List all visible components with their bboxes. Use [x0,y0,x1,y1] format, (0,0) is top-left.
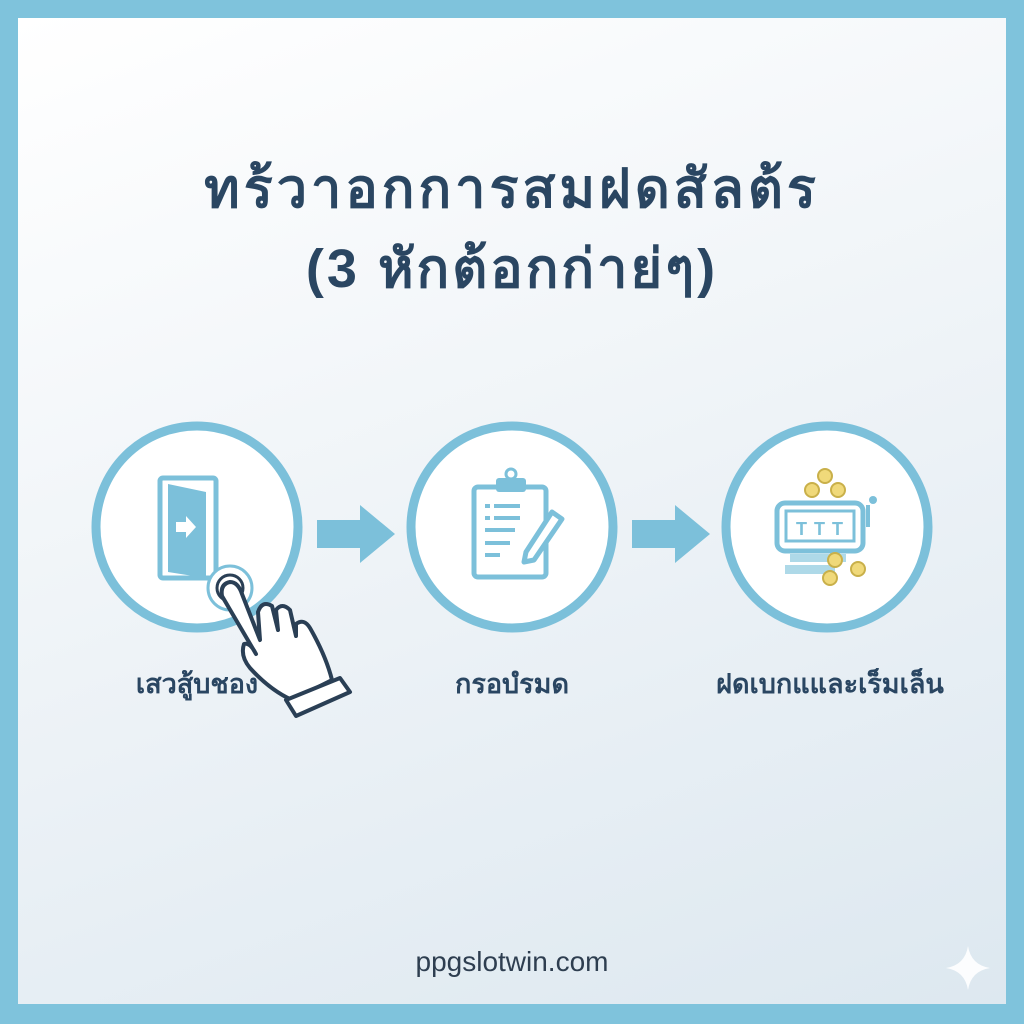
icon: pointing hand [206,564,352,718]
step 3 circle: slot machine icon: T [814,519,825,539]
label step 1: เสวสู้บชอง [136,669,258,699]
step 3 circle: slot machine icon [726,426,928,628]
title [204,159,820,299]
label step 3: ฝดเบกแและเร็มเล็น [716,669,944,699]
step 1 circle: door icon [96,426,298,628]
icon: sparkle [946,946,990,990]
arrow 1 [317,505,395,563]
step 3 circle: slot machine icon: T [832,519,843,539]
step 2 circle: clipboard icon [411,426,613,628]
step 3 circle: slot machine icon: T [796,519,807,539]
title: (3 หักต้อกก่าย่ๆ) [306,239,718,299]
label step 2: กรอบํรมด [455,669,569,699]
title: ทร้วาอกการสมฝดสัลต้ร [204,159,820,219]
arrow 2 [632,505,710,563]
footer url: ppgslotwin.com [416,946,608,977]
